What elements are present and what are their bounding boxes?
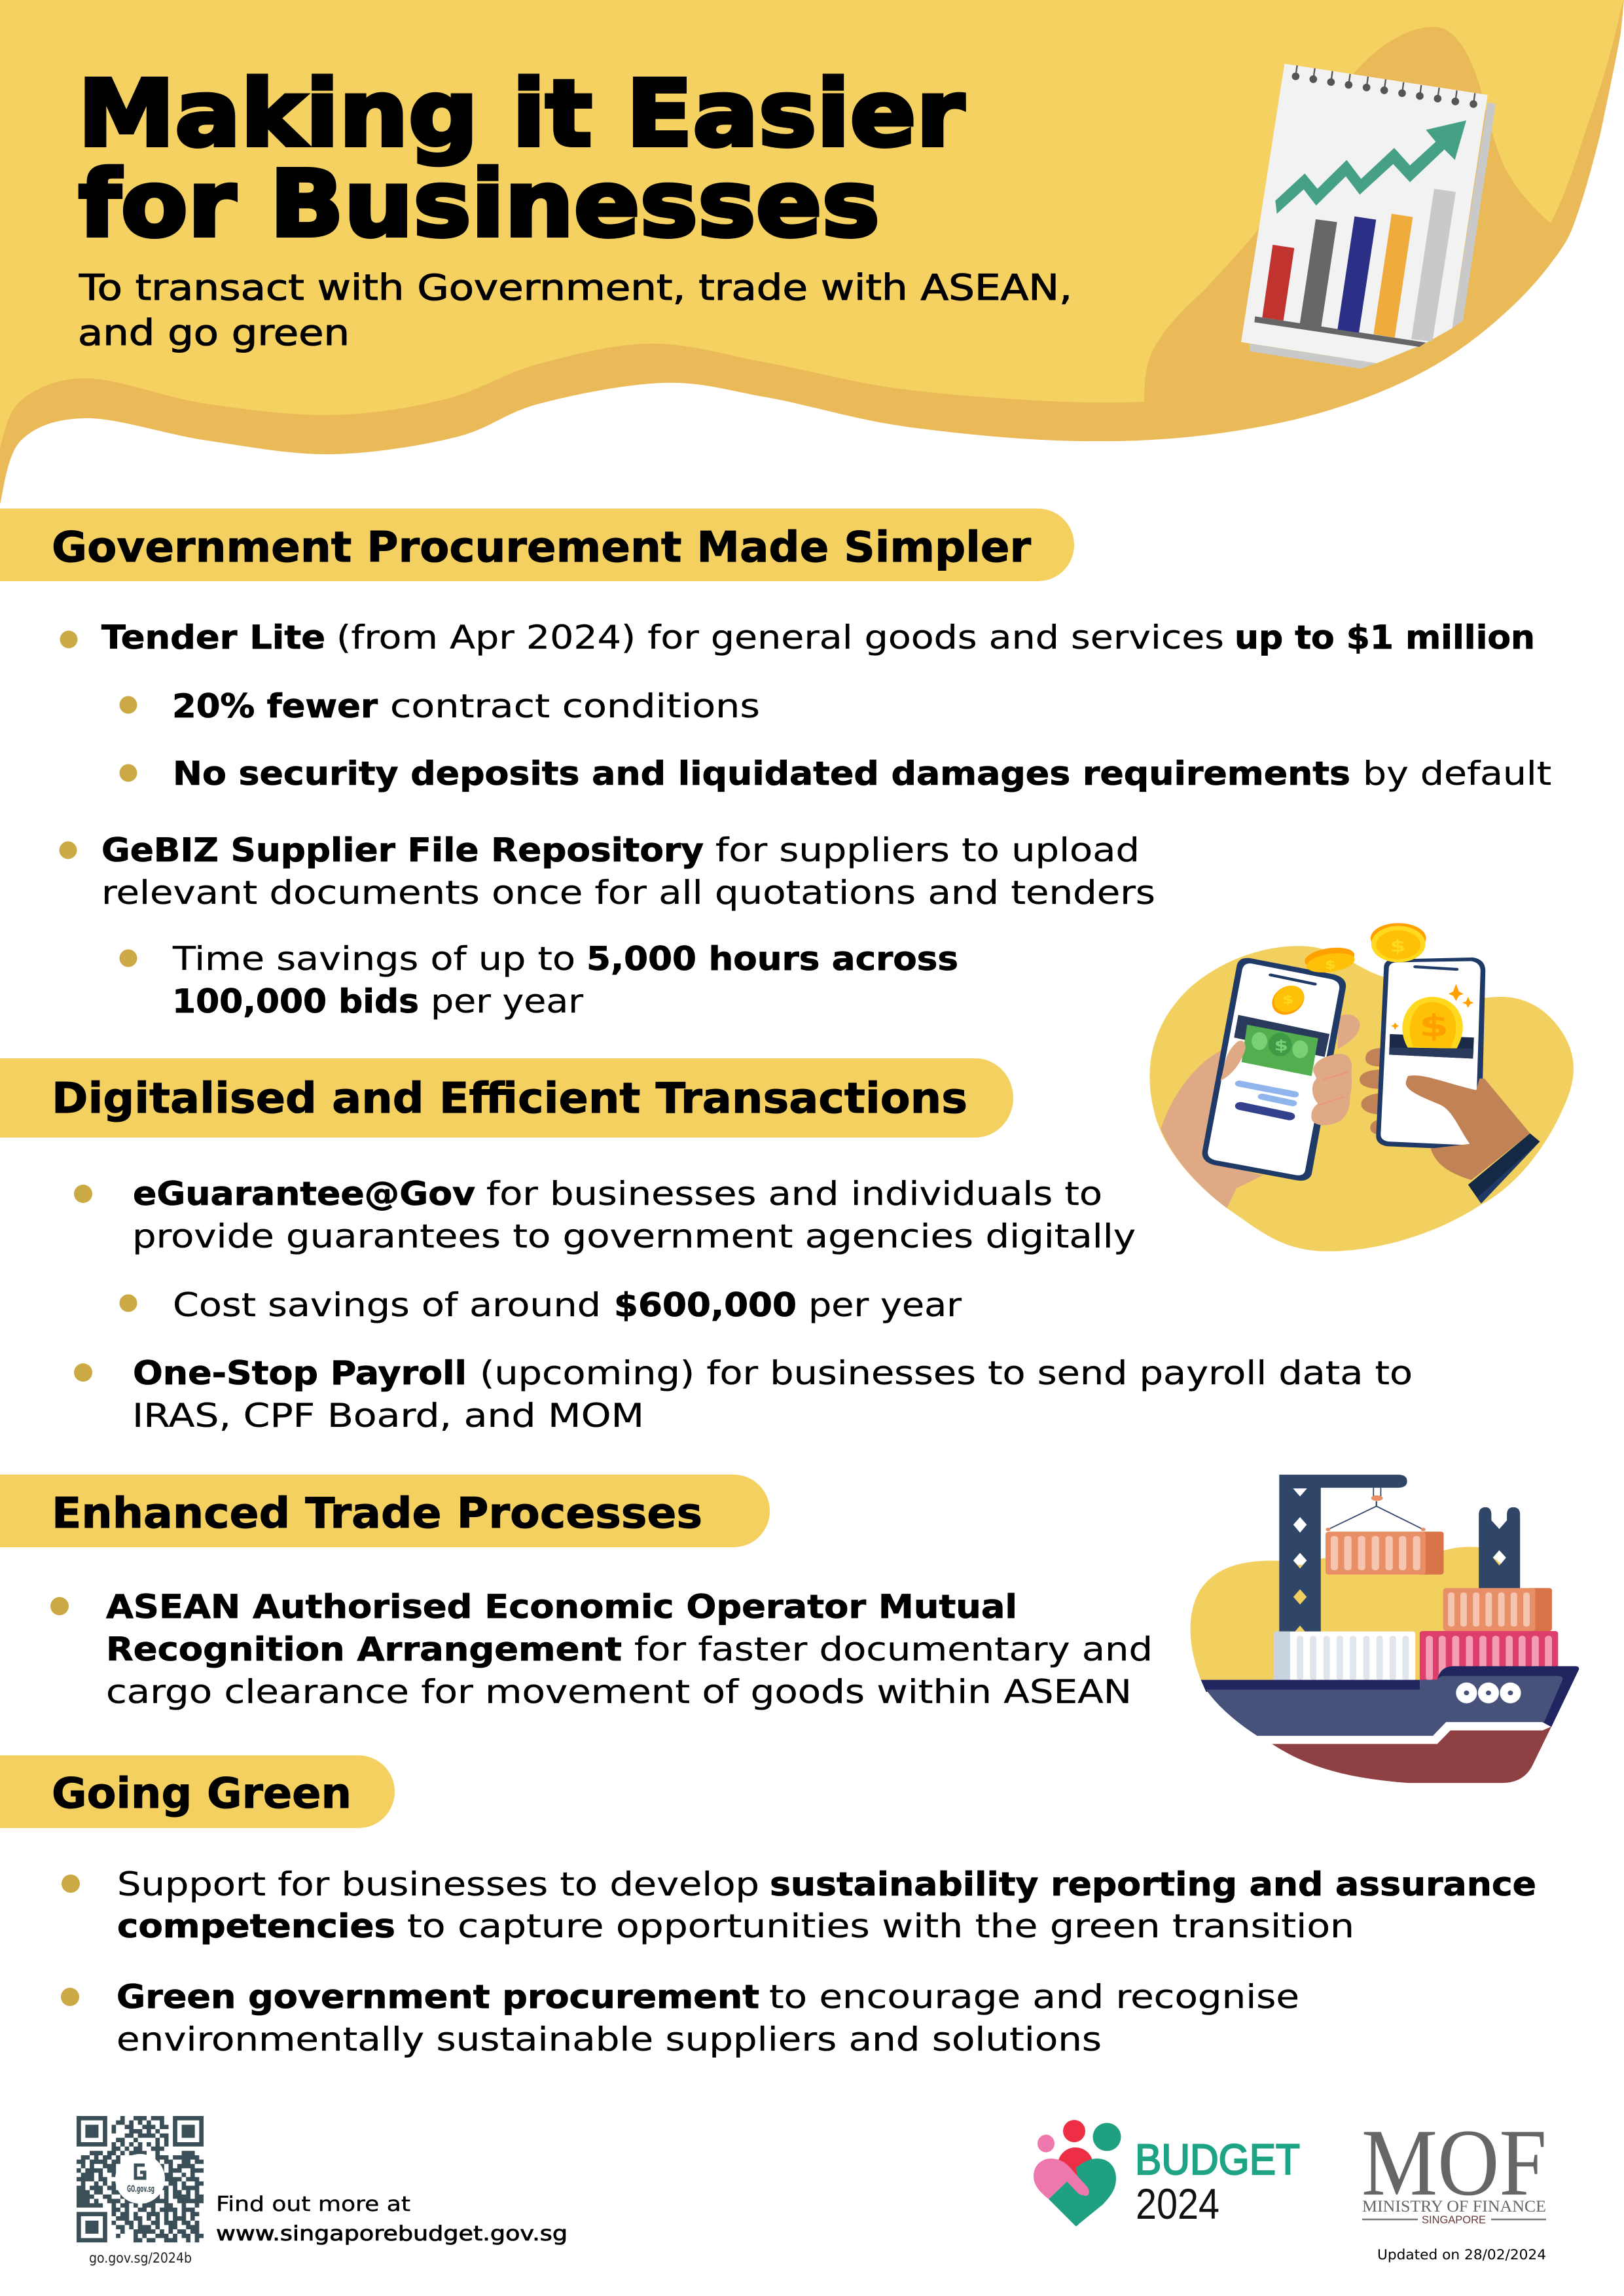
- bullet: ASEAN Authorised Economic Operator: ASEAN Authorised Economic Operator Mutual: [106, 1588, 1017, 1626]
- title: for Businesses: [79, 151, 880, 258]
- icon: notepad with chart: [1241, 63, 1496, 368]
- heading banner: [0, 1755, 395, 1828]
- sub-bullet: cost savings: $600,000: [614, 1286, 797, 1324]
- sub-bullet: time savings: 5,000 hours across: [586, 940, 958, 978]
- logo: Ministry of Finance: SINGAPORE: [1422, 2214, 1486, 2226]
- bullet: ASEAN Authorised Economic Operator: cargo clearance for movement of goods within ASEAN: [106, 1673, 1132, 1711]
- panel: Going Green: [0, 1755, 1536, 2058]
- bullet: green government procurement: [61, 1978, 1299, 2058]
- bullet: green government procurement: environmentally sustainable suppliers and solutions: [117, 2020, 1102, 2058]
- bullet: Tender Lite: up to $1 million: [1235, 619, 1535, 656]
- sub-bullet: 20% fewer: contract conditions: [390, 687, 760, 725]
- title: [78, 61, 964, 258]
- QR code: [77, 2118, 204, 2266]
- bullet: GeBIZ Supplier File Repository: for suppliers to upload: [715, 831, 1140, 869]
- heading banner: Enhanced Trade Processes: [52, 1490, 702, 1538]
- bullet: ASEAN Authorised Economic Operator: Recognition Arrangement: [106, 1630, 622, 1668]
- sub-bullet: cost savings: Cost savings of around: [173, 1286, 601, 1324]
- subtitle: and go green: [78, 312, 350, 353]
- bullet: Tender Lite: Tender Lite: [101, 619, 325, 656]
- find out more text: [216, 2193, 568, 2246]
- bullet: sustainability reporting: to capture opportunities with the green transition: [407, 1907, 1354, 1945]
- sub-bullet: time savings: 100,000 bids: [172, 982, 419, 1020]
- sub-bullet: time savings: [119, 940, 958, 1020]
- heading banner: [0, 1475, 770, 1547]
- sub-bullet: no security deposits: No security deposits and liquidated damages requirements: [173, 755, 1350, 793]
- bullet: green government procurement: to encourage and recognise: [769, 1978, 1299, 2016]
- bullet: Tender Lite: (from Apr 2024) for general goods and services: [336, 619, 1224, 656]
- panel: Government Procurement Made Simpler: [0, 509, 1551, 1020]
- updated date: Updated on 28/02/2024: [1377, 2247, 1546, 2263]
- bullet: eGuarantee@Gov: for businesses and individuals to: [486, 1175, 1102, 1213]
- icon: hands exchanging money on phones: [1149, 923, 1574, 1251]
- icon: container ship with crane: [1191, 1475, 1579, 1783]
- subtitle: [78, 267, 1072, 353]
- panel: header background: [0, 0, 1624, 504]
- icon: hands exchanging money on phones: $: [1274, 1037, 1288, 1054]
- QR code: go.gov.sg/2024b: [89, 2250, 192, 2266]
- find out more text: Find out more at: [216, 2193, 410, 2216]
- bullet: One-Stop Payroll: One-Stop Payroll: [133, 1354, 467, 1392]
- sub-bullet: cost savings: [119, 1286, 962, 1324]
- bullet: sustainability reporting: sustainability reporting and assurance: [770, 1865, 1536, 1903]
- title: Making it Easier: [78, 61, 964, 168]
- icon: hands exchanging money on phones: $: [1419, 1009, 1449, 1044]
- sub-bullet: time savings: per year: [431, 982, 583, 1020]
- sub-bullet: no security deposits: by default: [1363, 755, 1551, 793]
- bullet: GeBIZ Supplier File Repository: [59, 831, 1155, 912]
- bullet: One-Stop Payroll: IRAS, CPF Board, and MOM: [132, 1397, 644, 1435]
- heading banner: Digitalised and Efficient Transactions: [52, 1075, 967, 1123]
- subtitle: To transact with Government, trade with ASEAN,: [79, 267, 1072, 308]
- bullet: sustainability reporting: competencies: [117, 1907, 395, 1945]
- bullet: Tender Lite: [60, 619, 1535, 656]
- bullet: eGuarantee@Gov: eGuarantee@Gov: [133, 1175, 475, 1213]
- bullet: eGuarantee@Gov: [74, 1175, 1136, 1255]
- sub-bullet: cost savings: per year: [808, 1286, 962, 1324]
- sub-bullet: time savings: Time savings of up to: [172, 940, 575, 978]
- icon: hands exchanging money on phones: $: [1282, 993, 1293, 1007]
- panel: Digitalised and Efficient Transactions: [0, 1058, 1413, 1435]
- panel: Enhanced Trade Processes: [0, 1475, 1153, 1711]
- icon: hands exchanging money on phones: $: [1390, 937, 1406, 956]
- bullet: sustainability reporting: [62, 1865, 1536, 1945]
- QR code: GO.gov.sg: [127, 2184, 154, 2195]
- logo: Ministry of Finance: MINISTRY OF FINANCE: [1362, 2198, 1546, 2215]
- logo: Budget 2024: 2024: [1136, 2179, 1219, 2228]
- logo: Ministry of Finance: MOF: [1362, 2109, 1547, 2215]
- heading banner: [0, 509, 1074, 581]
- heading banner: Going Green: [52, 1770, 352, 1818]
- bullet: One-Stop Payroll: [74, 1354, 1413, 1435]
- bullet: ASEAN Authorised Economic Operator: [50, 1588, 1153, 1711]
- sub-bullet: 20% fewer: [119, 687, 760, 725]
- bullet: sustainability reporting: Support for businesses to develop: [117, 1865, 759, 1903]
- find out more text: www.singaporebudget.gov.sg: [216, 2222, 568, 2246]
- heading banner: Government Procurement Made Simpler: [52, 524, 1031, 572]
- bullet: green government procurement: Green government procurement: [117, 1978, 759, 2016]
- bullet: GeBIZ Supplier File Repository: relevant documents once for all quotations and tenders: [101, 874, 1155, 912]
- logo: Budget 2024: BUDGET: [1135, 2135, 1300, 2183]
- sub-bullet: 20% fewer: 20% fewer: [172, 687, 378, 725]
- heading banner: [0, 1058, 1013, 1138]
- icon: hands exchanging money on phones: $: [1325, 958, 1336, 972]
- bullet: ASEAN Authorised Economic Operator: for faster documentary and: [634, 1630, 1153, 1668]
- bullet: GeBIZ Supplier File Repository: GeBIZ Supplier File Repository: [101, 831, 704, 869]
- logo: Budget 2024: [1034, 2120, 1300, 2228]
- bullet: eGuarantee@Gov: provide guarantees to government agencies digitally: [132, 1217, 1136, 1255]
- bullet: One-Stop Payroll: (upcoming) for businesses to send payroll data to: [480, 1354, 1413, 1392]
